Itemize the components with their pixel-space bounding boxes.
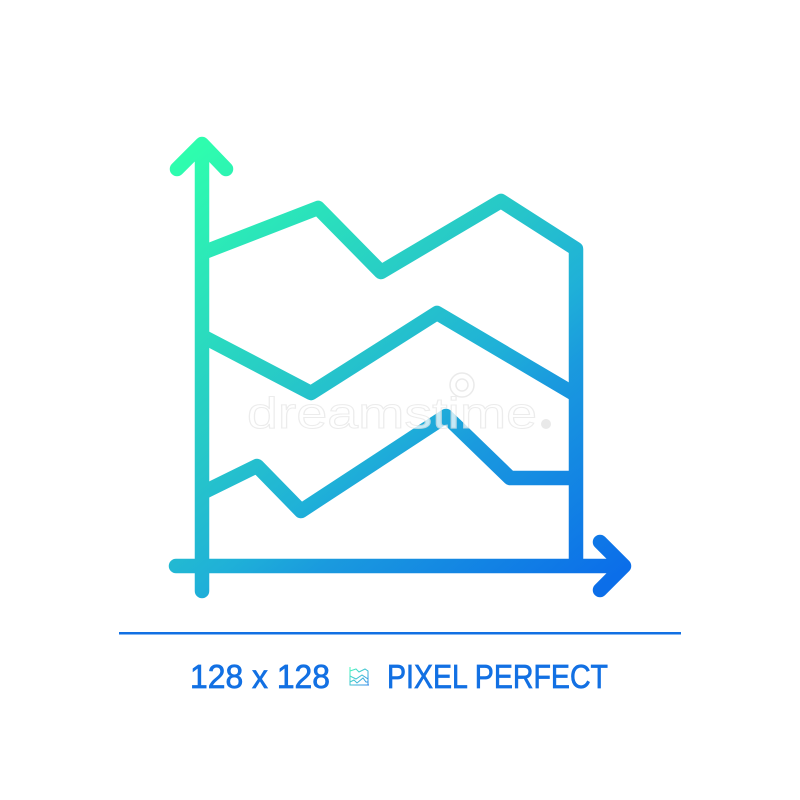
- y axis with arrow: [177, 144, 226, 591]
- x axis with arrow: [176, 542, 624, 590]
- watermark: [247, 373, 551, 438]
- top data line: [202, 201, 576, 566]
- divider line: [119, 632, 681, 634]
- bottom data line: [202, 416, 576, 511]
- caption: size label: 128 x 128: [190, 658, 330, 695]
- icon: multi-line area chart: [176, 144, 624, 591]
- watermark: dreamstime: [247, 389, 537, 438]
- middle data line: [202, 313, 576, 395]
- caption: pixel perfect: PIXEL PERFECT: [387, 658, 608, 695]
- icon: small chart glyph: [350, 667, 369, 685]
